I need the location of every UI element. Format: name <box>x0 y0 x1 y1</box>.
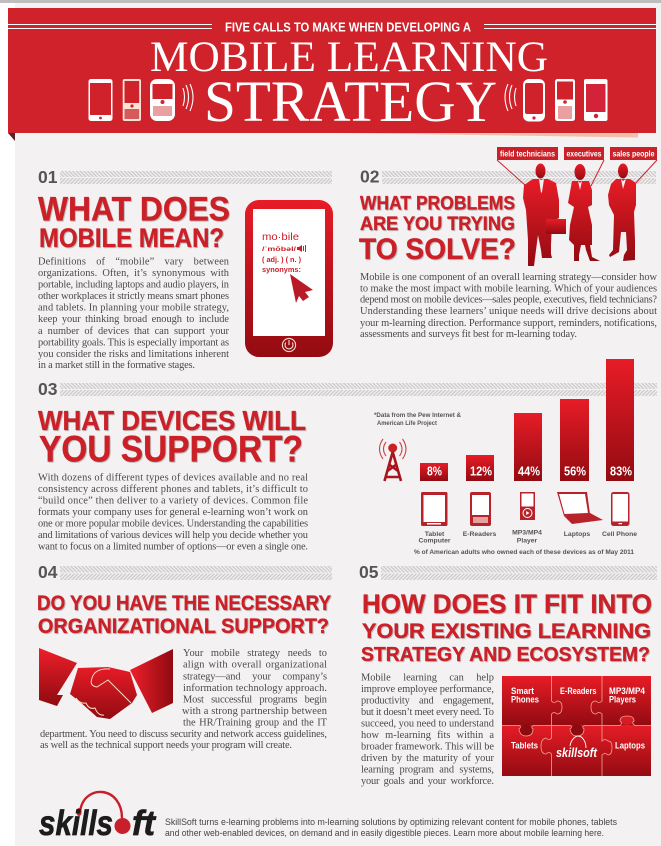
label: executives: executives <box>566 148 602 158</box>
text block 01: Definitions of “mobile” vary between <box>38 257 230 268</box>
device labels: Computer <box>418 538 451 544</box>
text block 01: in a market still in the formative stages. <box>38 360 195 371</box>
icon: cell phone <box>611 492 630 526</box>
label: sales people <box>610 147 657 160</box>
footer text: and other web-enabled devices, on demand and in easily digestible pieces. Learn more about mobile learning here. <box>165 828 604 839</box>
definition text <box>262 231 301 274</box>
puzzle labels: Laptops <box>615 741 645 752</box>
text block 02: depend most on mobile devices—sales people, executives, field technicians? <box>360 295 657 306</box>
data source note <box>374 412 461 427</box>
heading 03 <box>38 405 306 470</box>
icon: signal waves right <box>505 84 516 111</box>
puzzle logo: skillsoft <box>556 745 598 760</box>
text block 03: “build once” then deliver to a variety of devices. Common file <box>38 496 308 506</box>
text block 04: strategy—and your company’s <box>183 671 327 682</box>
heading 04: DO YOU HAVE THE NECESSARY <box>37 592 331 615</box>
heading 01 <box>38 190 230 253</box>
definition text: mo·bile <box>262 231 299 243</box>
icons: phones right <box>523 79 608 122</box>
heading 01: MOBILE MEAN? <box>39 223 224 253</box>
text block 04: align with overall organizational <box>183 660 327 671</box>
heading 02: WHAT PROBLEMS <box>360 194 515 214</box>
heading 05: STRATEGY AND ECOSYSTEM? <box>361 644 650 666</box>
text block 03: consistency across different phones and tablets, it’s difficult to <box>38 484 308 495</box>
heading 03: YOU SUPPORT? <box>39 428 303 470</box>
text block 05: Mobile learning can help <box>361 673 494 684</box>
icon: phone with dictionary definition <box>245 200 333 357</box>
definition text: ( adj. ) ( n. ) <box>262 257 301 264</box>
speaker icon <box>297 245 306 252</box>
skillsoft logo: ft <box>132 804 156 843</box>
text block 03: one or more popular mobile devices. Understanding the capabilities <box>38 519 308 530</box>
section 05 <box>359 562 657 787</box>
device labels: Player <box>517 538 538 544</box>
icons: phones left <box>88 79 175 121</box>
section 04 <box>37 562 332 751</box>
section 01 <box>38 167 333 371</box>
banner subtitle: FIVE CALLS TO MAKE WHEN DEVELOPING A <box>225 20 472 34</box>
skillsoft logo <box>39 792 156 843</box>
silhouette: field technician <box>523 164 566 266</box>
label: field technicians: field technicians <box>500 148 555 158</box>
footer text <box>165 817 617 839</box>
bar: MP3/MP4 player 44%: 44% <box>518 465 540 479</box>
icon: e-reader <box>470 492 491 526</box>
data source note: American Life Project <box>377 420 438 427</box>
text block 02: your m-learning direction. Performance support, reminders, notifications, <box>360 318 657 329</box>
text block 01: a number of devices that can support your <box>38 326 230 337</box>
skillsoft logo: skills <box>39 804 113 843</box>
text block 02: assessments and surveys fit best for m-learning today. <box>360 329 577 340</box>
dark tab fills <box>519 724 584 736</box>
device labels: E-Readers <box>463 531 497 538</box>
text block 02: to make the most impact with mobile learning. Which of your audiences <box>360 283 657 294</box>
bright tab fill <box>620 716 634 725</box>
bar: tablet computer 8%: 8% <box>427 465 442 479</box>
bar: cell phone 83% <box>606 359 634 481</box>
bar: laptops 56% <box>560 399 589 481</box>
puzzle logo <box>556 736 598 760</box>
text block 05: productivity and engagement, <box>361 696 494 707</box>
heading 01: WHAT DOES <box>38 190 230 228</box>
device labels: Laptops <box>564 531 590 538</box>
text block 04: Your mobile strategy needs to <box>183 648 327 659</box>
text block 05: improve employee performance, <box>361 684 494 695</box>
icon: signal tower <box>380 439 406 481</box>
heading 02 <box>359 194 516 266</box>
silhouette: executive <box>568 164 600 261</box>
bar: laptops 56%: 56% <box>564 465 586 479</box>
puzzle labels: Smart <box>511 686 535 697</box>
banner title line 2: STRATEGY <box>204 69 497 134</box>
cursor arrow <box>290 274 313 303</box>
device labels: Tablet <box>425 531 445 538</box>
puzzle labels: Tablets <box>511 741 538 752</box>
footer text: SkillSoft turns e-learning problems into m-learning solutions by optimizing relevant content for mobile phones, tablets <box>165 817 617 828</box>
bar: e-readers 12%: 12% <box>470 465 492 479</box>
text block 04: Most successful programs begin <box>183 694 328 705</box>
text block 05: learning program and systems, <box>361 765 494 776</box>
puzzle seams and knobs <box>502 676 651 776</box>
text block 03: want to focus on a limited number of options—or even a single one. <box>38 542 308 553</box>
puzzle labels <box>511 686 646 752</box>
text block 05: driven by the maturity of your <box>361 753 495 764</box>
bar: MP3/MP4 player 44% <box>514 413 542 481</box>
puzzle graphic <box>502 676 651 776</box>
text block 03 <box>38 473 309 553</box>
text block 02: Mobile is one component of an overall learning strategy—consider how <box>360 272 657 283</box>
divider stripe 05 <box>381 566 657 580</box>
power button <box>282 338 296 352</box>
data source note: *Data from the Pew Internet & <box>374 412 461 419</box>
silhouette: sales person <box>608 164 636 261</box>
banner title line 1: MOBILE LEARNING <box>150 34 548 81</box>
definition text: synonyms: <box>262 267 301 274</box>
text block 04: as well as the technical support needs your program will create. <box>40 740 292 751</box>
text block 01: portability goals. This is especially important as <box>38 337 229 348</box>
icon: signal waves left <box>183 84 193 111</box>
label: field technicians <box>497 147 558 160</box>
text block 03: and limitations of various devices will help you decide whether you <box>38 530 309 541</box>
divider stripe 03 <box>60 383 657 396</box>
heading 05: YOUR EXISTING LEARNING <box>362 620 651 643</box>
label: executives <box>564 147 604 160</box>
number 02: 02 <box>360 167 380 187</box>
text block 03: formats your company uses for general e-learning won’t work on <box>38 507 309 518</box>
text block 05: but it doesn’t meet every need. To <box>361 707 494 718</box>
heading 04 <box>37 592 331 638</box>
text block 01: and tablets. In planning your mobile strategy, <box>38 303 229 314</box>
text block 04: the HR/Training group and the IT <box>183 717 328 728</box>
divider stripe 01 <box>60 171 332 184</box>
icon: tablet <box>421 492 448 526</box>
text block 02 <box>360 272 657 340</box>
icon: laptop <box>557 492 603 524</box>
device labels: MP3/MP4 <box>512 530 542 536</box>
text block 01: organizations. Often, it’s synonymous with <box>38 268 230 279</box>
chart caption: % of American adults who owned each of these devices as of May 2011 <box>414 549 634 556</box>
text block 05 <box>361 673 495 787</box>
text block 01: other workplaces it strictly means smart phones <box>38 291 229 302</box>
section 03 <box>38 359 657 556</box>
text block 04: with a strong partnership between <box>182 706 328 717</box>
number 05: 05 <box>359 562 379 582</box>
section 02 <box>359 147 657 340</box>
heading 04: ORGANIZATIONAL SUPPORT? <box>38 615 329 638</box>
text block 05: your goals and your workforce. <box>361 776 494 787</box>
divider stripe 04 <box>60 566 332 580</box>
text block 01: you consider the risks and limitations inherent <box>38 349 229 360</box>
puzzle labels: E-Readers <box>560 686 596 697</box>
number 01: 01 <box>38 167 58 187</box>
heading 05 <box>361 589 652 666</box>
bar: cell phone 83%: 83% <box>610 465 632 479</box>
banner <box>8 8 656 141</box>
text block 04 <box>40 648 328 751</box>
bar chart <box>420 359 634 481</box>
connector lines <box>497 160 657 186</box>
text block 05: broader framework. This will be <box>361 742 494 753</box>
definition text: /ˈmōbəl/ <box>262 245 296 253</box>
heading 02: ARE YOU TRYING <box>360 214 515 235</box>
text block 05: succeed, you need to understand <box>361 719 495 730</box>
text block 03: With dozens of different types of devices available and no real <box>38 473 308 484</box>
device labels <box>418 530 637 544</box>
heading 03: WHAT DEVICES WILL <box>38 405 306 436</box>
puzzle labels: MP3/MP4 <box>609 686 646 697</box>
bar: tablet computer 8% <box>420 463 448 481</box>
bar: e-readers 12% <box>466 455 494 481</box>
puzzle labels: Phones <box>511 695 539 706</box>
heading 05: HOW DOES IT FIT INTO <box>362 589 652 619</box>
text block 04: department. You need to discuss security and network access guidelines, <box>40 729 327 740</box>
icon: MP3 player <box>520 492 535 520</box>
text block 01: portable, including laptops and audio players, in <box>38 280 230 291</box>
text block 04: information technology approach. <box>183 683 327 694</box>
text block 05: how m-learning fits within a <box>361 730 494 741</box>
number 03: 03 <box>38 379 58 399</box>
heading 02: TO SOLVE? <box>359 233 516 266</box>
footer <box>39 792 617 843</box>
icon: handshake <box>39 648 173 719</box>
number 04: 04 <box>38 562 58 582</box>
text block 01: keep your thinking broad enough to include <box>38 314 229 325</box>
device labels: Cell Phone <box>602 531 637 538</box>
puzzle labels: Players <box>609 695 636 706</box>
divider stripe 02 <box>382 171 656 184</box>
text block 01 <box>38 257 230 371</box>
text block 02: Understanding these learners’ unique needs will drive decisions about <box>360 306 657 317</box>
